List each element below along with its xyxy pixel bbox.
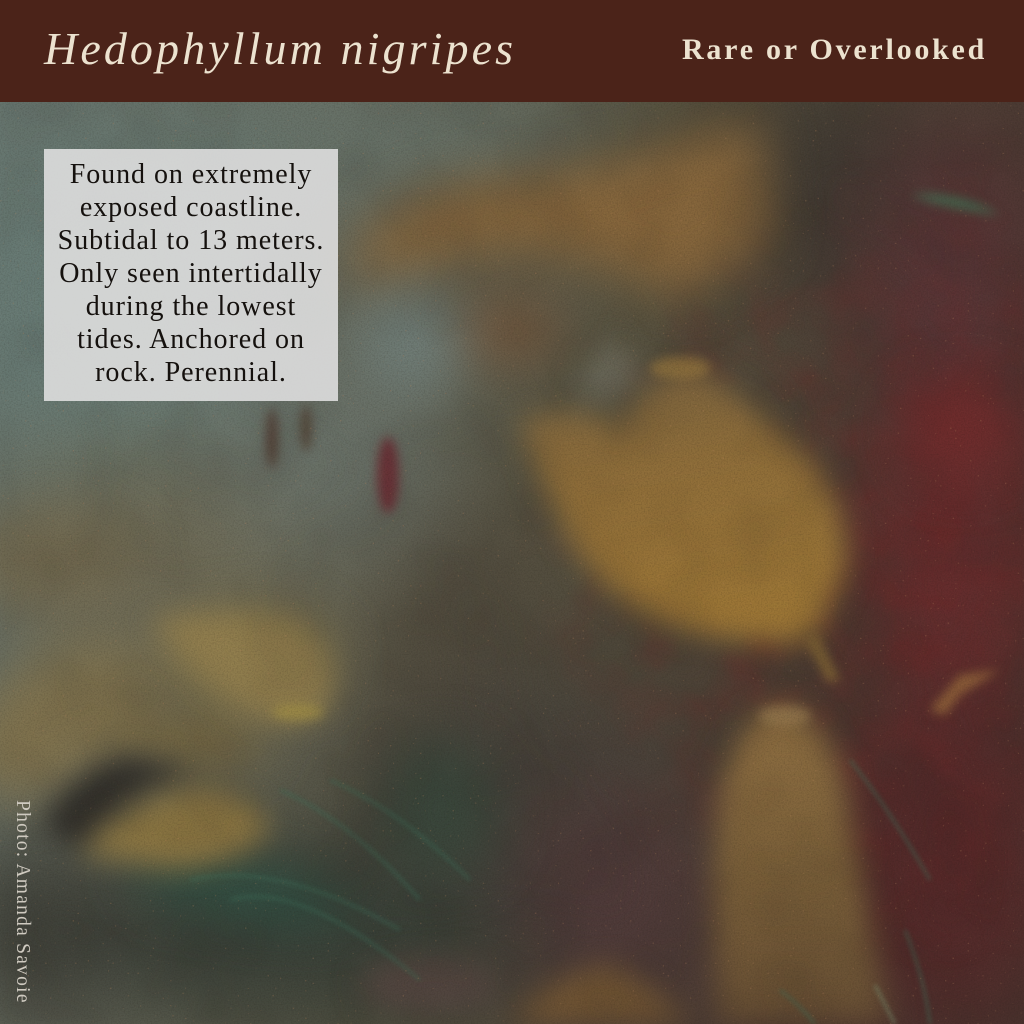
highlights and thin details [266,194,1000,726]
info text box [44,149,338,401]
title: Hedophyllum nigripes [44,23,516,74]
info text box: rock. Perennial. [95,357,287,388]
green seagrass strands [190,760,930,1024]
info text box: during the lowest [86,291,296,322]
info text box: Only seen intertidally [59,258,323,289]
header bar [0,0,1024,102]
red seaweed texture [700,290,1020,768]
info text box: tides. Anchored on [77,324,305,355]
info text box: exposed coastline. [80,192,302,223]
info text box: Subtidal to 13 meters. [58,225,324,256]
status label: Rare or Overlooked [682,33,987,66]
kelp blades, soft [0,120,1015,933]
photo credit: Photo: Amanda Savoie [12,800,33,1004]
info text box: Found on extremely [70,159,312,190]
